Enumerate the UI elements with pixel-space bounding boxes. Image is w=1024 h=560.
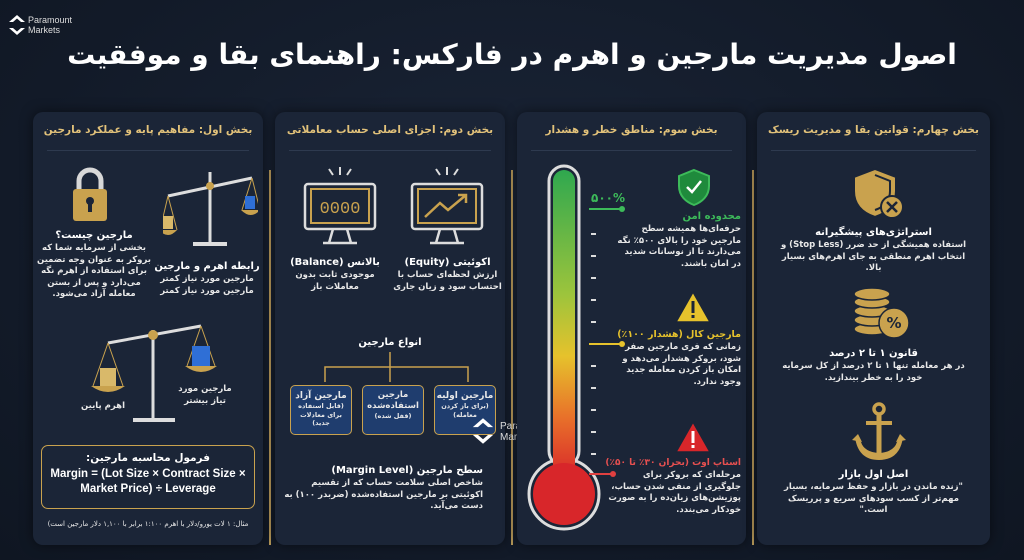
text: 1-2 percent rule: قانون ۱ تا ۲ درصد (829, 348, 918, 359)
icon: coins percent (854, 288, 908, 338)
text: equity: اکوئیتی (Equity) (404, 257, 491, 268)
icon: lock (73, 168, 107, 221)
panel: part 2 account (275, 112, 505, 545)
panel: part 4 survival (757, 112, 990, 545)
logo (9, 15, 72, 35)
text: 1-2 percent rule: در هر معامله تنها ۱ تا ۲ درصد از کل سرمایه خود را به خطر بیندازید. (782, 361, 965, 382)
text: leverage relation: مارجین مورد نیاز کمتر (160, 286, 254, 296)
text: balance: موجودی ثابت بدون (295, 270, 375, 280)
box: used margin (362, 385, 424, 435)
text: preventive strategies (780, 226, 966, 273)
text: balance: معاملات باز (311, 282, 359, 292)
text: balance (290, 257, 380, 292)
heading: margin types: انواع مارجین (358, 337, 422, 348)
thermometer: ۵۰۰% (591, 191, 625, 205)
text: what is margin: مارجین چیست؟ (55, 230, 133, 241)
text: leverage relation: رابطه اهرم و مارجین (154, 261, 260, 272)
box: free margin: مارجین آزاد (295, 391, 347, 401)
icon: red warning (677, 424, 709, 452)
text: preventive strategies: استفاده همیشگی از حد ضرر (Stop Less) و انتخاب اهرم منطقی به جای اهرم‌های بسیار بالا. (781, 240, 966, 273)
heading 2: بخش دوم: اجزای اصلی حساب معاملاتی (287, 124, 493, 136)
text: leverage relation: مارجین مورد نیاز کمتر (160, 274, 254, 284)
icon: scale bottom (91, 324, 217, 422)
label: more margin: مارجین مورد (178, 384, 232, 394)
box: used margin: مارجین استفاده‌شده (367, 390, 419, 411)
thermometer (528, 164, 625, 530)
panel: part 3 risk zones (517, 112, 746, 545)
text: margin call: زمانی که فری مارجین صفر شود، بروکر هشدار می‌دهد و امکان باز کردن معامله جدید وجود ندارد. (622, 342, 741, 386)
text: margin level: شاخص اصلی سلامت حساب که از تقسیم اکوئیتی بر مارجین استفاده‌شده (ضربدر ۱۰۰) به دست می‌آید. (284, 478, 483, 511)
formula box (41, 445, 255, 509)
text: safe zone: حرفه‌ای‌ها همیشه سطح مارجین خود را بالای ۵۰۰٪ نگه می‌دارند تا از نوسانات شدید در امان باشند. (617, 224, 741, 268)
label: more margin: تیاز بیشتر (184, 396, 226, 406)
logo: Paramount (28, 15, 72, 25)
icon: green shield (678, 168, 710, 206)
heading 4: بخش چهارم: قوانین بقا و مدیریت ریسک (768, 124, 979, 136)
text: stop out: استاپ اوت (بحران ۳۰٪ تا ۵۰٪) (605, 458, 741, 468)
watermark logo: Markets (500, 432, 536, 443)
icon: balance monitor (304, 167, 376, 244)
panel: part 1 basics (33, 112, 263, 545)
formula box: Market Price) ÷ Leverage (80, 483, 216, 495)
text: margin call: مارجین کال (هشدار ۱۰۰٪) (617, 329, 741, 340)
text: leverage relation (154, 261, 260, 296)
text: equity (393, 257, 502, 292)
text: first market rule: اصل اول بازار (839, 469, 908, 480)
box: free margin (290, 385, 352, 435)
text: equity: ارزش لحظه‌ای حساب با احتساب سود و زیان جاری (393, 270, 502, 292)
icon: yellow warning (677, 294, 709, 322)
box: free margin: (قابل استفاده برای معادلات جدید) (298, 402, 344, 427)
box: initial margin: مارجین اولیه (437, 391, 493, 401)
logo: Markets (28, 25, 60, 35)
box: used margin: (قفل شده) (375, 412, 411, 420)
text: margin level: سطح مارجین (Margin Level) (331, 465, 483, 476)
text: first market rule: "زنده ماندن در بازار و حفظ سرمایه، بسیار مهم‌تر از کسب سودهای سریع و پرریسک است." (784, 482, 963, 515)
text: what is margin: بخشی از سرمایه شما که بروکر به عنوان وجه تضمین برای استفاده از اهرم نگه می‌دارد و پس از بستن معامله آزاد می‌شود. (37, 243, 151, 299)
icon: equity monitor (410, 167, 484, 244)
box: initial margin: (برای باز کردن معامله) (441, 402, 489, 418)
heading 1: بخش اول: مفاهیم پایه و عملکرد مارجین (44, 124, 252, 136)
text: balance: بالانس (Balance) (290, 257, 380, 268)
icon: balance monitor: 0000 (320, 200, 360, 219)
icon: shield x (854, 170, 902, 217)
example note: مثال: ۱ لات یورو/دلار با اهرم ۱:۱۰۰ برابر با ۱,۱۰۰ دلار مارجین است) (48, 520, 248, 528)
icon: scale top (163, 172, 258, 246)
formula box: فرمول محاسبه مارجین: (86, 452, 210, 464)
title: اصول مدیریت مارجین و اهرم در فارکس: راهنمای بقا و موفقیت (67, 38, 957, 71)
text: safe zone: محدوده امن (682, 211, 741, 222)
label: low leverage: اهرم پایین (81, 401, 125, 411)
tree connectors (324, 352, 469, 382)
watermark logo (472, 418, 549, 444)
icon: coins percent: % (886, 314, 902, 332)
text: stop out: مرحله‌ای که بروکر برای جلوگیری از منفی شدن حساب، پوزیشن‌های زیان‌ده را به صورت خودکار می‌بندد. (608, 470, 741, 514)
box: initial margin (434, 385, 496, 435)
text: preventive strategies: استراتژی‌های پیشگیرانه (815, 227, 932, 238)
heading 3: بخش سوم: مناطق خطر و هشدار (545, 124, 718, 136)
text: 1-2 percent rule (782, 348, 965, 382)
icon: anchor (852, 402, 906, 460)
formula box: Margin = (Lot Size × Contract Size × (50, 468, 246, 480)
watermark logo: Paramount (500, 421, 549, 432)
label: more margin (178, 384, 232, 406)
